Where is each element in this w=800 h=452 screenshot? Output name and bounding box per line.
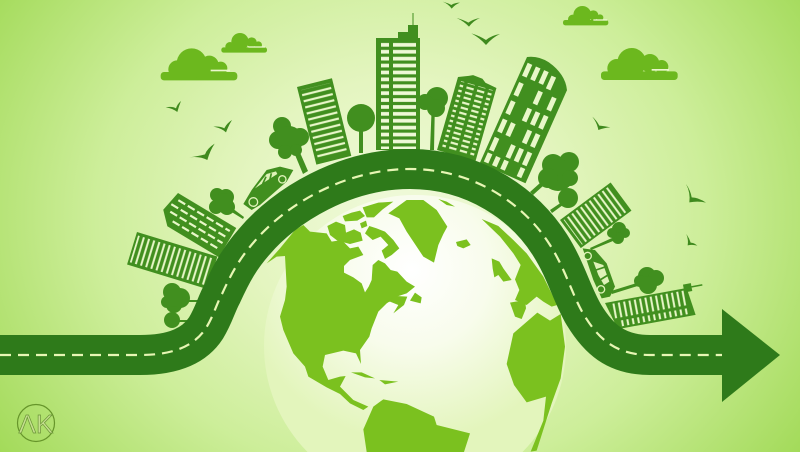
road surface <box>0 169 730 355</box>
Iceland <box>456 239 471 248</box>
Greenland <box>388 200 447 263</box>
building: central tower <box>376 13 420 150</box>
Arctic islands <box>327 202 399 259</box>
Svalbard <box>438 199 455 207</box>
left flock <box>166 101 232 160</box>
building: brick windows <box>437 71 498 161</box>
building: striped right <box>560 183 631 248</box>
cloud: right small <box>563 6 608 25</box>
building: upper left <box>157 191 236 257</box>
right city <box>417 53 707 331</box>
continents <box>267 199 565 452</box>
left city <box>127 13 420 328</box>
car on right slope <box>583 248 615 298</box>
road centre dashes <box>0 169 722 355</box>
road <box>0 169 730 355</box>
cloud: left large <box>161 48 237 80</box>
tree: small right <box>550 188 578 213</box>
globe <box>264 195 566 452</box>
arrow head <box>722 309 780 402</box>
right flock <box>592 117 706 246</box>
car on left slope <box>243 167 293 210</box>
British Isles <box>492 258 512 282</box>
tree: large crown <box>269 117 309 174</box>
tree: bottom left small <box>164 312 193 328</box>
clouds <box>161 6 678 80</box>
North America <box>267 225 415 410</box>
building: domed tower <box>480 53 575 183</box>
tree: above car <box>590 222 630 250</box>
top flock <box>443 2 500 45</box>
cloud: left small <box>221 33 267 53</box>
building: lower left <box>127 232 217 289</box>
South America <box>363 399 470 452</box>
tree: behind building <box>347 104 375 153</box>
Europe <box>482 219 557 307</box>
logo ring <box>18 404 54 442</box>
logo: AK watermark <box>18 404 54 442</box>
Iberia <box>510 300 526 319</box>
cloud: right large <box>601 48 678 80</box>
tree: by upper-left building <box>209 188 244 219</box>
tree: large right <box>530 152 579 195</box>
logo text: ΛK <box>19 409 54 439</box>
building: striped slanted <box>297 78 351 165</box>
tree: lower right <box>611 267 664 294</box>
building: lower right <box>604 281 707 331</box>
globe disc <box>264 195 566 452</box>
Nova Scotia <box>383 293 422 313</box>
Africa <box>507 313 565 452</box>
tree: between tower and building <box>417 87 448 150</box>
tree: bottom left large <box>161 283 205 313</box>
birds <box>166 2 706 246</box>
Caribbean islands <box>351 372 398 384</box>
